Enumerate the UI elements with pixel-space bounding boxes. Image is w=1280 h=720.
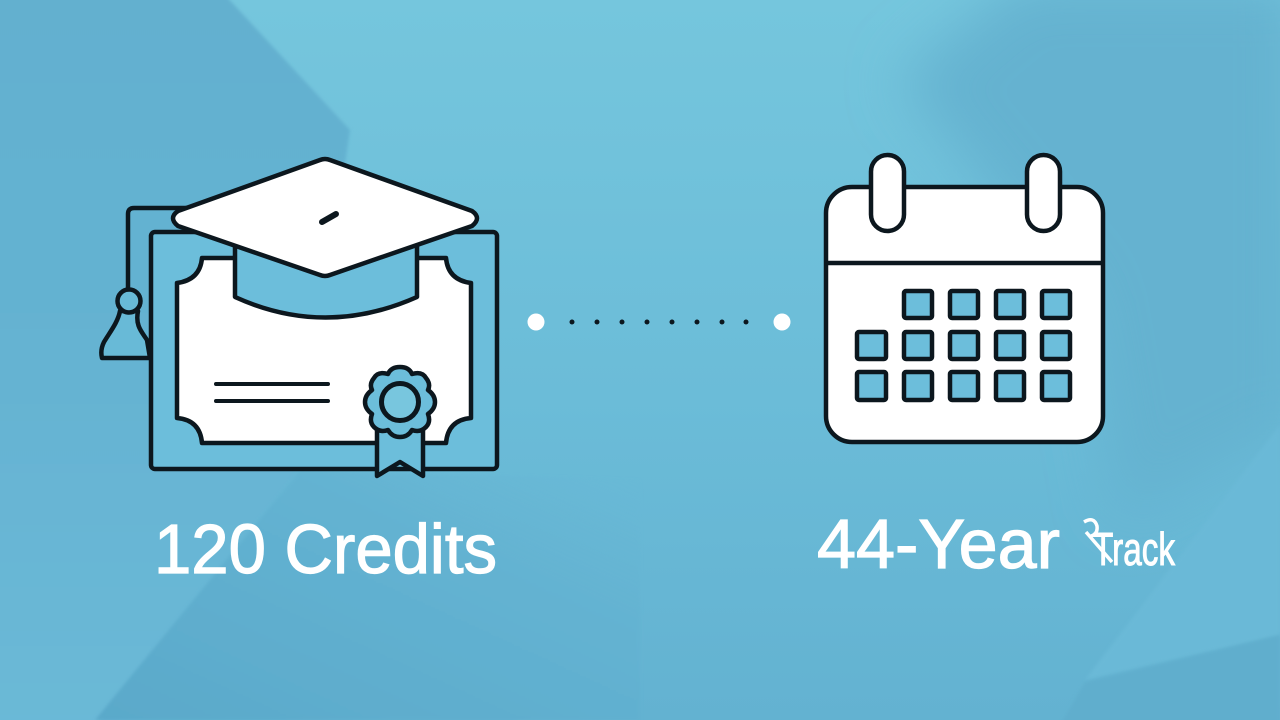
tassel: [101, 290, 150, 358]
calendar body: [826, 187, 1103, 442]
cap band: [235, 240, 417, 318]
connector: dotted line: [528, 314, 790, 330]
label: garbled Track: Track: [1093, 523, 1176, 575]
tassel cord: [128, 208, 195, 290]
certificate text lines: [216, 384, 328, 401]
date squares: [857, 291, 1070, 400]
cap button: [322, 214, 336, 222]
label: 120 Credits: 120 Credits: [154, 510, 497, 588]
cap top: [173, 159, 477, 276]
dots: [570, 320, 748, 324]
binder rings: [871, 155, 1060, 231]
end dot: [774, 314, 790, 330]
label: 44-Year: 44-Year: [817, 505, 1060, 583]
label: garbled Track: [1084, 520, 1176, 575]
header divider: [826, 261, 1103, 265]
seal ring: [382, 384, 418, 420]
diploma frame: [151, 232, 497, 469]
rosette seal: [365, 367, 435, 437]
diploma icon with graduation cap: [101, 159, 497, 476]
certificate paper: [177, 258, 471, 443]
calendar icon: [826, 155, 1103, 442]
ribbon: [377, 430, 423, 476]
start dot: [528, 314, 544, 330]
